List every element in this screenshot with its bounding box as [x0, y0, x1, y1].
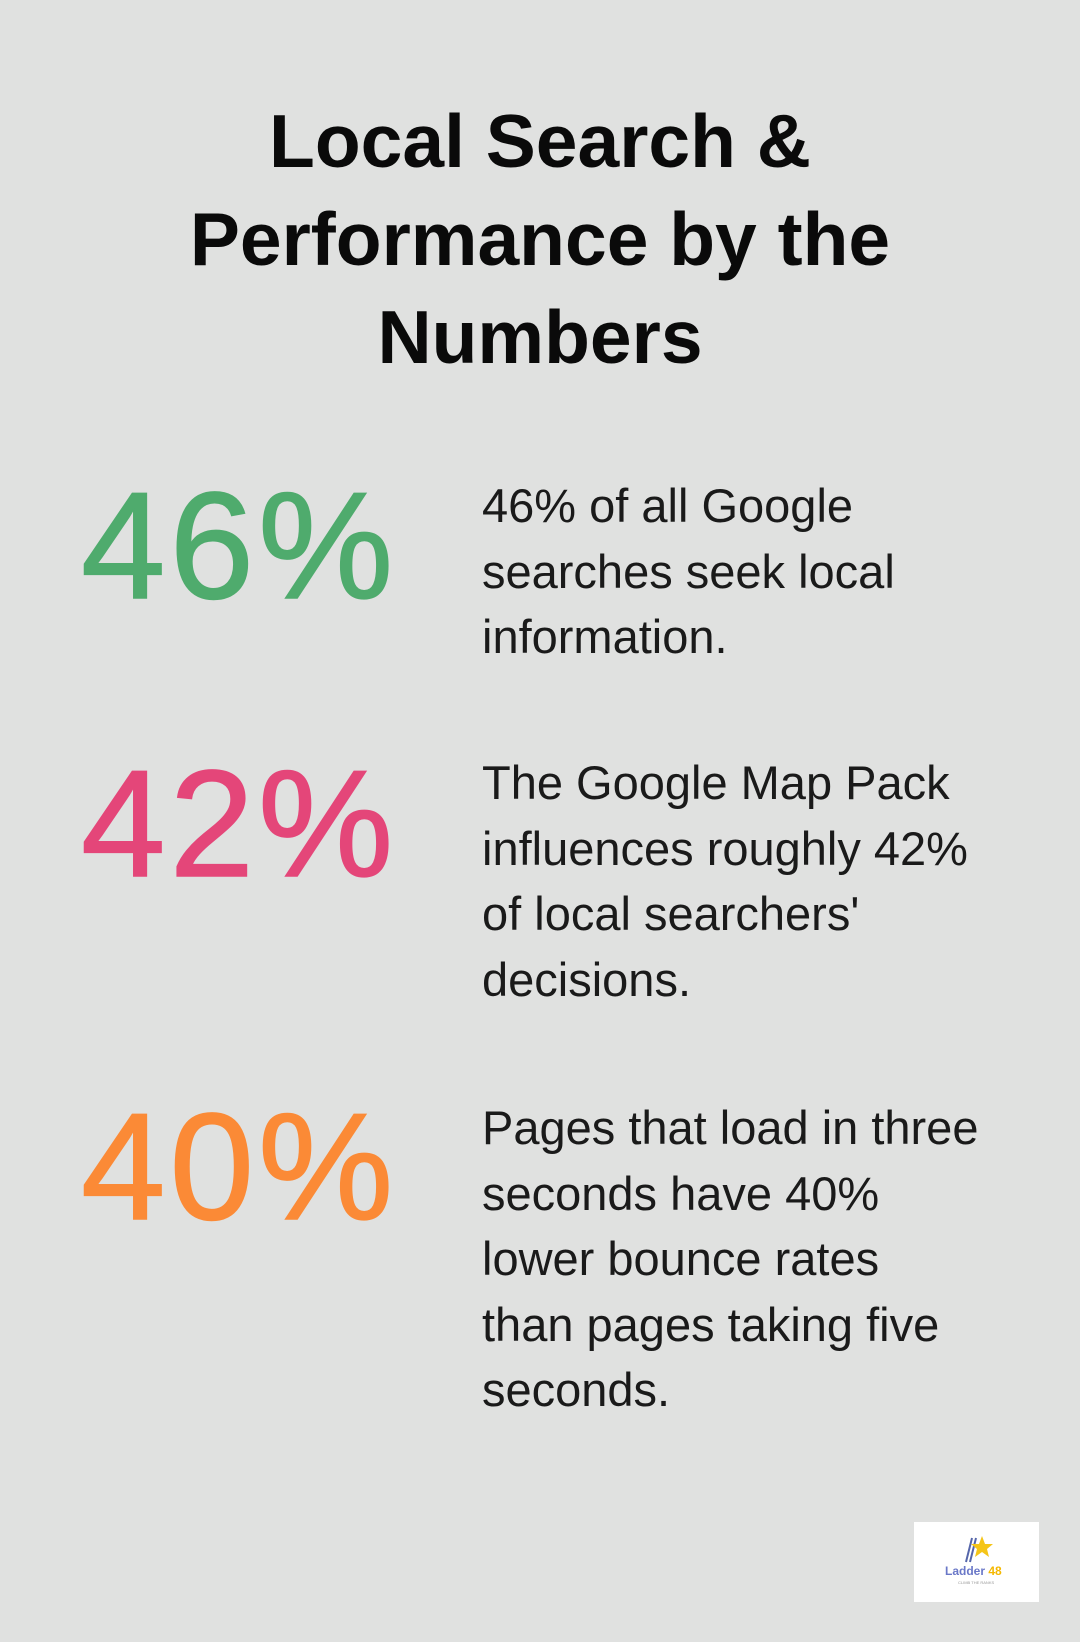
logo: Ladder 48: CLIMB THE RANKS — [958, 1580, 994, 1585]
text: 42% description: of local searchers' — [482, 887, 859, 940]
stat: 46%: 46% — [81, 461, 397, 631]
text: 40% description: seconds. — [482, 1363, 670, 1416]
stat: 40%: 40% — [81, 1082, 397, 1252]
text: 40% description: than pages taking five — [482, 1298, 939, 1350]
text: 46% description: 46% of all Google — [482, 479, 853, 532]
logo: Ladder 48: Ladder 48 — [945, 1564, 1002, 1578]
text: 42% description: The Google Map Pack — [482, 756, 950, 809]
stat: 42%: 42% — [81, 739, 397, 909]
text: 40% description: Pages that load in three — [482, 1101, 978, 1154]
text: 42% description: influences roughly 42% — [482, 822, 968, 874]
text: 40% description — [482, 1101, 978, 1416]
text: 46% description — [482, 479, 895, 663]
text: 46% description: information. — [482, 610, 728, 663]
text: 46% description: searches seek local — [482, 544, 895, 598]
title — [190, 99, 890, 379]
text: 40% description: seconds have 40% — [482, 1166, 879, 1220]
title: Performance by the — [190, 197, 890, 281]
logo: Ladder 48 — [914, 1522, 1039, 1602]
title: Local Search & — [269, 99, 811, 183]
title: Numbers — [377, 295, 703, 379]
text: 42% description — [482, 756, 968, 1006]
text: 42% description: decisions. — [482, 952, 691, 1006]
text: 40% description: lower bounce rates — [482, 1232, 879, 1285]
